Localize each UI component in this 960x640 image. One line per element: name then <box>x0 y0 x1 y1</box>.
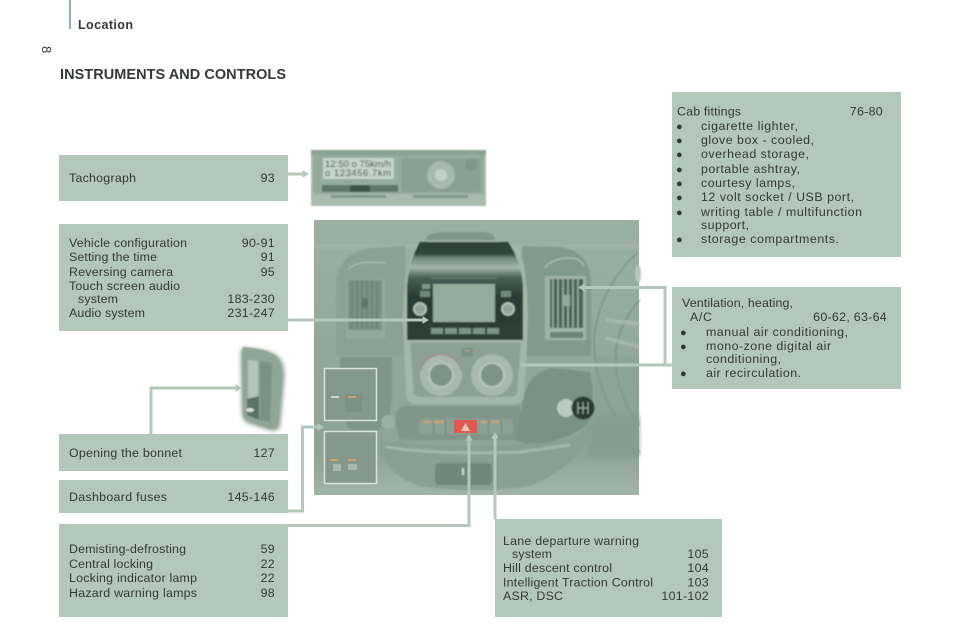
panel: ventilation: air recirculation. <box>706 366 801 380</box>
panel: vehicle configuration: system <box>78 292 118 306</box>
panel: dashboard fuses: 145-146 <box>227 490 275 504</box>
panel: vehicle configuration: 95 <box>261 265 275 279</box>
top dash bands <box>314 244 639 249</box>
section rule <box>69 0 71 29</box>
panel: ventilation: mono-zone digital air <box>706 339 831 353</box>
panel: vehicle configuration: Setting the time <box>69 250 157 264</box>
panel: lane departure: 104 <box>687 561 709 575</box>
arrow: tachograph <box>288 171 308 177</box>
panel: lane departure: system <box>512 547 552 561</box>
panel: demisting and locking: Central locking <box>69 557 153 571</box>
icon: tachograph unit: o 123456.7km <box>325 168 391 179</box>
panel: cab fittings <box>672 92 901 257</box>
panel: demisting and locking <box>59 524 288 617</box>
panel: cab fittings: cigarette lighter, <box>701 119 798 133</box>
climate knob left <box>420 354 462 396</box>
black head unit <box>407 242 523 340</box>
panel: demisting and locking: 22 <box>261 557 275 571</box>
panel: ventilation: A/C <box>690 310 712 324</box>
panel: vehicle configuration: Audio system <box>69 306 145 320</box>
panel: vehicle configuration: 183-230 <box>227 292 275 306</box>
panel: lane departure: 101-102 <box>661 589 709 603</box>
panel: cab fittings: writing table / multifunction <box>700 205 862 219</box>
panel: vehicle configuration: Reversing camera <box>69 265 173 279</box>
panel: cab fittings: ● <box>676 149 683 161</box>
section label: Location: Location <box>78 18 133 32</box>
panel: lane departure: 105 <box>687 547 709 561</box>
panel: tachograph: 93 <box>261 171 275 185</box>
dashboard illustration <box>314 220 641 495</box>
panel: vehicle configuration: 231-247 <box>227 306 275 320</box>
climate knob right <box>471 354 513 396</box>
panel: demisting and locking: 59 <box>261 542 275 556</box>
panel: tachograph <box>59 155 288 201</box>
arrow: ventilation <box>521 284 672 365</box>
right vent <box>545 276 586 340</box>
inset: switches lower <box>324 432 376 484</box>
panel: ventilation: Ventilation, heating, <box>682 296 793 310</box>
arrow: dashboard fuses <box>288 424 323 511</box>
panel: ventilation: conditioning, <box>706 352 781 366</box>
panel: tachograph: Tachograph <box>69 171 136 185</box>
steering column arcs <box>594 253 640 452</box>
panel: cab fittings: support, <box>701 218 749 232</box>
switch strip <box>419 419 513 434</box>
panel: cab fittings: 76-80 <box>850 104 883 118</box>
side shrouds <box>336 246 405 356</box>
gear knob <box>557 399 575 417</box>
panel: ventilation: ● <box>680 368 687 380</box>
panel: demisting and locking: Demisting-defrosting <box>69 542 186 556</box>
left vent <box>346 279 385 339</box>
panel: vehicle configuration: 91 <box>261 250 275 264</box>
panel: vehicle configuration: Vehicle configuration <box>69 236 187 250</box>
lower fascia <box>396 406 524 440</box>
panel: lane departure: Intelligent Traction Control <box>503 576 653 590</box>
panel: cab fittings: 12 volt socket / USB port, <box>701 190 854 204</box>
panel: cab fittings: glove box - cooled, <box>701 133 814 147</box>
panel: cab fittings: storage compartments. <box>701 232 839 246</box>
panel: ventilation <box>672 287 901 389</box>
panel: cab fittings: overhead storage, <box>701 147 809 161</box>
panel: ventilation: ● <box>680 327 687 339</box>
panel: lane departure: Hill descent control <box>503 561 612 575</box>
panel: demisting and locking: Locking indicator lamp <box>69 571 197 585</box>
centre console surround <box>403 241 528 404</box>
icon: bonnet release handle <box>241 347 284 430</box>
panel: lane departure: 103 <box>687 576 709 590</box>
panel: cab fittings: portable ashtray, <box>701 162 800 176</box>
panel: cab fittings: ● <box>676 121 683 133</box>
arrow: bonnet <box>151 385 241 434</box>
page number: 8 <box>39 46 54 53</box>
panel: cab fittings: ● <box>676 178 683 190</box>
panel: cab fittings: ● <box>676 164 683 176</box>
panel: dashboard fuses: Dashboard fuses <box>69 490 167 504</box>
icon: tachograph unit: 12:50 o 75km/h <box>325 159 391 170</box>
panel: opening the bonnet: Opening the bonnet <box>69 446 183 460</box>
panel: cab fittings: ● <box>676 192 683 204</box>
panel: demisting and locking: 98 <box>261 586 275 600</box>
panel: cab fittings: Cab fittings <box>677 104 741 118</box>
panel: vehicle configuration: 90-91 <box>242 236 275 250</box>
panel: ventilation: manual air conditioning, <box>706 325 848 339</box>
panel: lane departure: Lane departure warning <box>503 534 639 548</box>
inset: switches upper <box>324 368 376 420</box>
arrow: lane departure <box>492 433 498 519</box>
hazard button <box>454 420 477 433</box>
arrow: hazard <box>288 435 472 526</box>
panel: vehicle configuration: Touch screen audio <box>69 279 180 293</box>
panel: lane departure <box>495 519 722 617</box>
panel: ventilation: ● <box>680 341 687 353</box>
panel: cab fittings: ● <box>676 207 683 219</box>
panel: lane departure: ASR, DSC <box>503 589 563 603</box>
panel: demisting and locking: Hazard warning lamps <box>69 586 197 600</box>
hood <box>426 232 495 240</box>
stalks <box>606 320 639 347</box>
panel: demisting and locking: 22 <box>261 571 275 585</box>
panel: opening the bonnet <box>59 434 288 471</box>
arrow: vehicle configuration <box>288 317 428 323</box>
panel: ventilation: 60-62, 63-64 <box>813 310 887 324</box>
climate panel <box>410 343 521 397</box>
icon: tachograph unit <box>311 150 486 206</box>
panel: vehicle configuration <box>59 224 288 331</box>
title: INSTRUMENTS AND CONTROLS <box>60 67 286 83</box>
panel: cab fittings: ● <box>676 234 683 246</box>
panel: dashboard fuses <box>59 480 288 513</box>
cup holder <box>340 357 392 430</box>
panel: cab fittings: ● <box>676 135 683 147</box>
panel: opening the bonnet: 127 <box>253 446 275 460</box>
panel: cab fittings: courtesy lamps, <box>701 176 795 190</box>
